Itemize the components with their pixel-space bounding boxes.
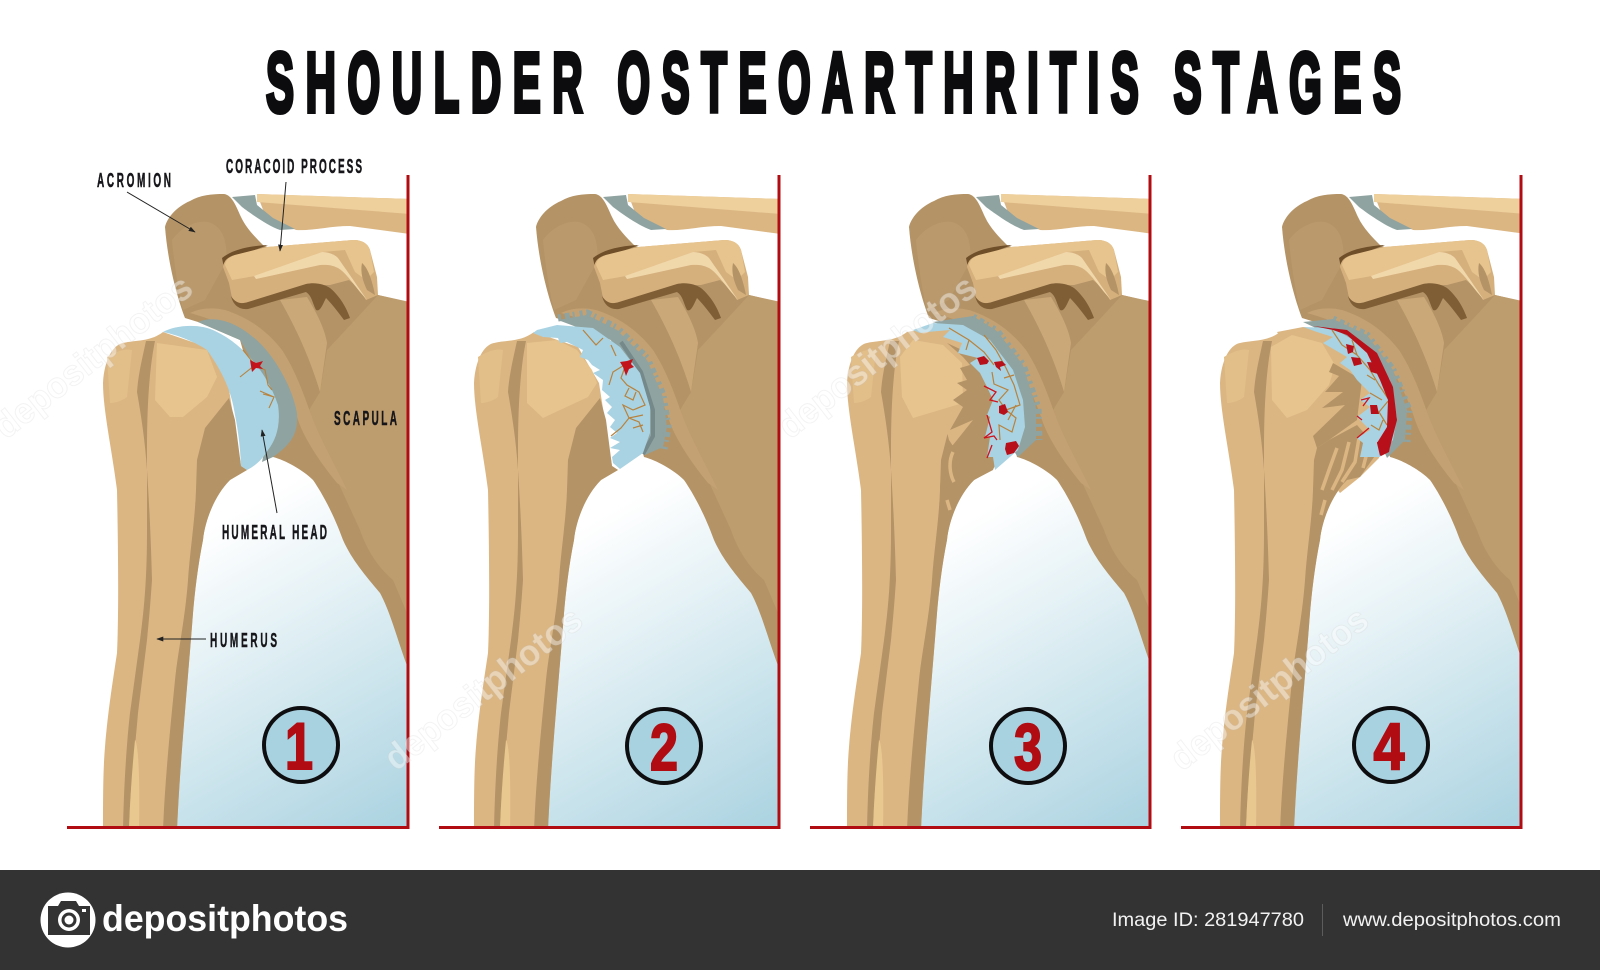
cartilage <box>533 325 650 469</box>
cracks <box>583 330 645 436</box>
stage number 1 <box>264 708 338 783</box>
footer logo wordmark: depositphotos <box>102 898 348 939</box>
stage number 2: 2 <box>650 710 678 784</box>
title: SHOULDER OSTEOARTHRITIS STAGES <box>266 37 1401 130</box>
label: coracoid process: CORACOID PROCESS <box>226 157 362 178</box>
lesions <box>977 356 1019 455</box>
stage number 4 <box>1354 708 1428 783</box>
frame lines <box>67 175 408 828</box>
watermarks: depositphotos <box>1162 598 1376 778</box>
footer image id: Image ID: 281947780 <box>1112 909 1304 931</box>
lesion <box>250 360 263 372</box>
cartilage <box>163 326 279 470</box>
head highlight <box>900 340 963 418</box>
stage number 1: 1 <box>285 709 313 783</box>
bone erosion <box>1313 363 1362 448</box>
head fill <box>907 330 994 468</box>
joint gap band <box>933 316 1036 457</box>
panel: stage 3 <box>810 175 1154 830</box>
head highlight <box>1271 335 1335 418</box>
shoulder illustration stage 3 <box>847 194 1154 830</box>
panel: stage 2 <box>439 175 781 830</box>
frame lines <box>810 175 1150 828</box>
lesion <box>620 359 634 376</box>
label: scapula: SCAPULA <box>334 409 397 430</box>
joint gap band <box>198 319 297 462</box>
cartilage <box>913 323 1025 470</box>
bone erosion <box>940 343 994 532</box>
shoulder illustration stage 4 <box>1220 194 1527 830</box>
lesions <box>1346 344 1391 456</box>
label: humerus <box>157 631 277 652</box>
footer logo icon <box>40 892 96 948</box>
frame lines <box>1181 175 1521 828</box>
label: humerus: HUMERUS <box>210 631 277 652</box>
label: humeral head <box>222 430 327 544</box>
panel: stage 4 <box>1181 175 1527 830</box>
joint gap band <box>1303 319 1407 458</box>
label: acromion: ACROMION <box>97 171 171 192</box>
cracks <box>1332 330 1389 430</box>
cracks <box>949 328 1020 440</box>
cracks <box>240 350 274 408</box>
label: coracoid process <box>226 157 362 251</box>
head fill <box>1277 327 1387 493</box>
stage number 3 <box>991 709 1065 784</box>
red fissures <box>1357 398 1369 438</box>
joint gap band <box>558 315 667 455</box>
shoulder illustration stage 1 <box>103 194 410 830</box>
frame lines <box>439 175 779 828</box>
label: humeral head: HUMERAL HEAD <box>222 523 327 544</box>
red fissures <box>984 386 998 458</box>
panel: stage 1 <box>67 157 410 830</box>
stage number 2 <box>627 709 701 784</box>
shoulder illustration stage 2 <box>474 194 781 830</box>
watermarks <box>0 266 1376 778</box>
watermarks: depositphotos <box>376 598 590 778</box>
head highlight <box>155 343 217 417</box>
red crescent <box>1313 326 1397 456</box>
stage number 3: 3 <box>1014 710 1042 784</box>
stage number 4: 4 <box>1374 709 1405 783</box>
head highlight <box>527 340 597 418</box>
watermarks: depositphotos <box>770 266 984 446</box>
label: acromion <box>97 171 195 232</box>
footer bar <box>0 870 1600 970</box>
cartilage remnants <box>1303 327 1397 457</box>
footer website: www.depositphotos.com <box>1342 909 1561 931</box>
